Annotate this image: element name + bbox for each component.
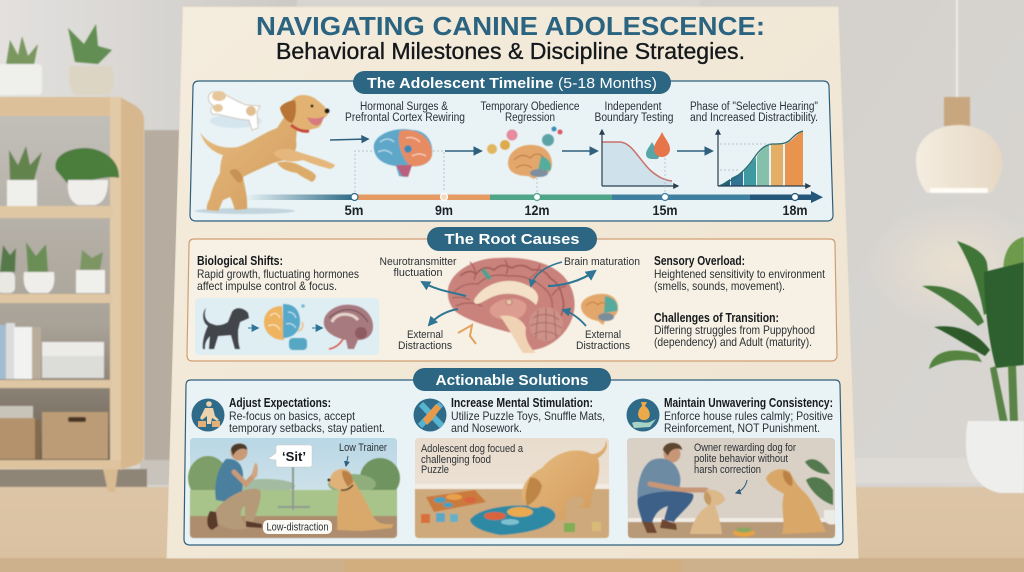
text: sensory overload: (smells, sounds, movement). xyxy=(654,279,785,293)
icon: colourful brain xyxy=(374,129,432,177)
heading pill: solutions: Actionable Solutions xyxy=(436,372,588,389)
illustration: dog to brain changes xyxy=(195,298,379,355)
text: adjust expectations: Re-focus on basics, accept xyxy=(229,409,356,423)
text: maintain consistency xyxy=(664,396,833,435)
label: external distractions, right: Distractions xyxy=(576,340,630,352)
heading pill: timeline xyxy=(353,71,671,94)
text: biological shifts: Rapid growth, fluctuating hormones xyxy=(197,267,359,281)
arrow: external distractions left xyxy=(429,309,458,325)
label: external distractions, left: External xyxy=(407,329,443,341)
label: neurotransmitter fluctuation: fluctuation xyxy=(394,267,442,279)
heading pill: root causes: The Root Causes xyxy=(444,231,580,248)
adult dog xyxy=(766,469,826,534)
milestone 5m: 5m xyxy=(344,202,364,218)
text: maintain consistency: Reinforcement, NOT Punishment. xyxy=(664,421,820,435)
icon: small dog sketch xyxy=(208,91,262,130)
icon: money bag in hand xyxy=(626,398,660,432)
step label: boundary testing xyxy=(594,101,674,124)
milestone 18m: 18m xyxy=(782,202,808,218)
chart: rising stacked curve xyxy=(718,130,810,186)
step label: obedience regression: Regression xyxy=(505,112,555,124)
text: biological shifts xyxy=(197,254,359,293)
chart: declining curve xyxy=(602,130,678,192)
caption: owner rewarding dog xyxy=(694,442,796,476)
icon: drops xyxy=(646,142,659,159)
panel: actionable solutions xyxy=(184,368,843,545)
text: increase mental stimulation: and Nosework. xyxy=(451,421,522,435)
label: external distractions, right: External xyxy=(585,329,621,341)
milestone 5m xyxy=(344,194,364,218)
heading pill: timeline: The Adolescent Timeline (5-18 Months) xyxy=(367,75,657,92)
arrow: brain maturation xyxy=(548,271,595,286)
pendant lamp xyxy=(865,0,1024,327)
toy blocks xyxy=(421,514,430,523)
potted plant, right xyxy=(922,237,1024,493)
photo: owner rewarding dog xyxy=(627,438,835,538)
arrow: boundary testing to selective hearing xyxy=(677,150,712,152)
photo: low-distraction training xyxy=(188,438,400,538)
caption: owner rewarding dog: Owner rewarding dog for xyxy=(694,442,796,454)
label: external distractions, right xyxy=(576,329,630,352)
text: sensory overload xyxy=(654,254,826,293)
puzzle board xyxy=(426,490,486,512)
timeline bar with milestones xyxy=(245,191,823,218)
milestone 9m xyxy=(435,194,453,218)
arrow: brain maturation to cortex xyxy=(531,262,562,286)
icon: black dog xyxy=(203,308,249,349)
label: brain maturation: Brain maturation xyxy=(564,256,640,268)
text: sensory overload: Heightened sensitivity to environment xyxy=(654,267,826,281)
panel: adolescent timeline xyxy=(190,71,833,221)
text: sensory overload: Sensory Overload: xyxy=(654,254,745,268)
illustration: jumping golden puppy xyxy=(195,95,335,214)
golden dog xyxy=(337,478,393,531)
bookshelf with plants, books and baskets xyxy=(0,24,144,492)
text: biological shifts: affect impulse control & focus. xyxy=(197,279,337,293)
arrow: external distractions right xyxy=(563,310,586,326)
icon: puzzle pieces xyxy=(414,398,446,432)
step label: selective hearing: and Increased Distractibility. xyxy=(690,112,818,124)
text: maintain consistency: Enforce house rules calmly; Positive xyxy=(664,409,833,423)
poster board xyxy=(167,7,858,572)
arrow: puppy to brain xyxy=(330,139,368,140)
heading pill: root causes xyxy=(427,227,597,251)
text: increase mental stimulation xyxy=(451,396,605,435)
arrow: caption to puppy xyxy=(736,480,747,493)
step label: boundary testing: Independent xyxy=(604,101,662,113)
speech bubble: sit: ‘Sit’ xyxy=(282,449,306,464)
milestone 12m: 12m xyxy=(524,202,550,218)
golden puppy xyxy=(522,440,607,521)
shelf baskets xyxy=(0,418,35,459)
shelf books xyxy=(0,325,6,379)
milestone 12m xyxy=(524,194,550,218)
caption: adolescent dog: Adolescent dog focued a xyxy=(421,443,524,455)
arrow: low trainer xyxy=(346,456,348,466)
shelf plants xyxy=(6,36,38,65)
text: challenges of transition: Challenges of Transition: xyxy=(654,311,779,325)
heading pill: solutions xyxy=(413,368,611,391)
caption: adolescent dog xyxy=(421,443,524,476)
subtitle: Behavioral Milestones & Discipline Strategies. xyxy=(276,38,745,64)
blue puzzle mat xyxy=(470,506,555,535)
panel: root causes xyxy=(187,227,837,361)
caption: owner rewarding dog: harsh correction xyxy=(694,464,761,476)
wooden stand xyxy=(344,560,681,572)
owner xyxy=(664,446,680,462)
puppy xyxy=(690,490,725,534)
bowl xyxy=(733,530,755,536)
caption: adolescent dog: Puzzle xyxy=(421,464,449,476)
text: increase mental stimulation: Increase Mental Stimulation: xyxy=(451,396,593,410)
label: low-distraction: Low-distraction xyxy=(266,522,328,534)
label: external distractions, left xyxy=(398,329,452,352)
step label: obedience regression: Temporary Obedience xyxy=(480,101,580,113)
arrow: brain to regression xyxy=(445,150,481,152)
step label: hormonal surges: Hormonal Surges & xyxy=(360,101,448,113)
step label: obedience regression xyxy=(480,101,580,124)
text: challenges of transition: Differing struggles from Puppyhood xyxy=(654,323,815,337)
title: NAVIGATING CANINE ADOLESCENCE: xyxy=(256,11,765,41)
training post xyxy=(278,466,310,510)
icon: two-tone brain xyxy=(264,304,307,350)
icon: trainer and dog xyxy=(192,398,224,432)
text: biological shifts: Biological Shifts: xyxy=(197,254,283,268)
caption: owner rewarding dog: polite behavior without xyxy=(694,453,788,465)
text: adjust expectations: Adjust Expectations: xyxy=(229,396,331,410)
step label: boundary testing: Boundary Testing xyxy=(594,112,674,124)
arrow: neurotransmitter xyxy=(422,282,466,296)
icon: small colourful brain xyxy=(581,294,618,325)
icon: neurotransmitters and brain xyxy=(487,126,562,179)
text: maintain consistency: Maintain Unwavering Consistency: xyxy=(664,396,833,410)
text: challenges of transition xyxy=(654,311,815,349)
illustration: central sagittal brain xyxy=(448,258,575,353)
milestone 18m xyxy=(782,194,808,218)
caption: adolescent dog: challenging food xyxy=(421,454,491,466)
label: neurotransmitter fluctuation xyxy=(380,256,457,279)
icon: distraction sparks xyxy=(458,325,476,344)
step label: selective hearing: Phase of "Selective Hearing" xyxy=(690,101,818,113)
step label: selective hearing xyxy=(690,101,818,124)
photo: dog with food puzzle xyxy=(415,438,609,538)
step label: hormonal surges xyxy=(345,101,465,124)
milestone 15m: 15m xyxy=(652,202,678,218)
text: adjust expectations: temporary setbacks, stay patient. xyxy=(229,421,385,435)
arrow: regression to boundary testing xyxy=(562,150,597,152)
text: challenges of transition: (dependency) and Adult (maturity). xyxy=(654,335,812,349)
label: low trainer: Low Trainer xyxy=(339,442,387,454)
label: neurotransmitter fluctuation: Neurotransmitter xyxy=(380,256,457,268)
trainer figure xyxy=(230,444,248,460)
title xyxy=(256,11,765,64)
milestone 15m xyxy=(652,194,678,218)
step label: hormonal surges: Prefrontal Cortex Rewiring xyxy=(345,112,465,124)
text: increase mental stimulation: Utilize Puzzle Toys, Snuffle Mats, xyxy=(451,409,605,423)
text: adjust expectations xyxy=(229,396,385,435)
milestone 9m: 9m xyxy=(435,202,453,218)
plant xyxy=(805,459,833,505)
icon: side-view brain xyxy=(324,305,373,349)
label: external distractions, left: Distractions xyxy=(398,340,452,352)
speech bubble: sit xyxy=(268,445,312,467)
